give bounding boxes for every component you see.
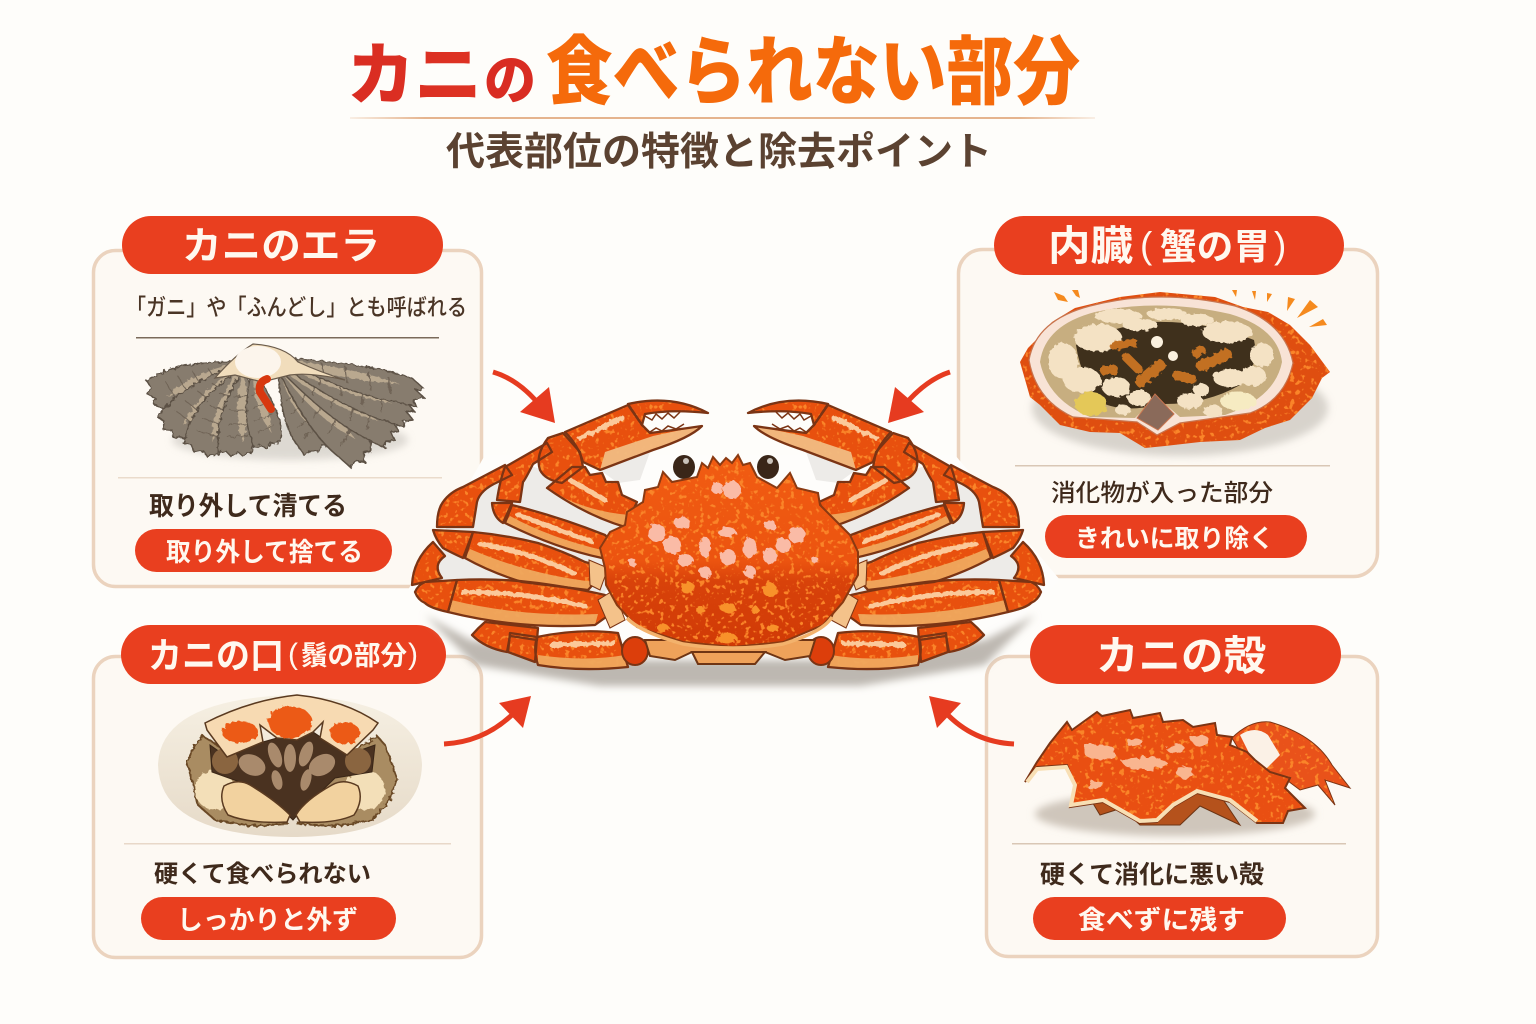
panel: カニのエラ (94, 216, 482, 586)
heading pill: 蟹の胃 (1160, 226, 1270, 267)
icon: gills (142, 344, 428, 473)
action button: 食べずに残す (1078, 905, 1245, 935)
heading pill: 内臓 (1048, 223, 1133, 269)
panel: カニの殻 (986, 625, 1378, 956)
title: カニ (347, 38, 482, 114)
heading pill (994, 216, 1344, 275)
icon: crab shell (1025, 710, 1350, 836)
action button (141, 897, 396, 940)
leg highlights (462, 418, 622, 645)
action button: しっかりと外ず (177, 905, 358, 935)
carapace gold blotches (657, 582, 779, 643)
action button: 取り外して捨てる (166, 537, 363, 567)
heading pill: カニのエラ (182, 226, 380, 268)
action button (135, 529, 392, 572)
action button: きれいに取り除く (1075, 525, 1274, 553)
heading pill: ) (1274, 225, 1286, 266)
icon: open shell with innards (1020, 290, 1330, 456)
icon: crab mouth (158, 695, 422, 837)
heading pill: ( (1140, 225, 1153, 266)
carapace outline (600, 455, 858, 647)
edge spikes (589, 535, 625, 628)
panel: 内臓 (958, 216, 1378, 576)
underside rim (645, 640, 815, 664)
arrow: shell to crab (929, 696, 1014, 744)
title: 食べられない部分 (546, 30, 1080, 114)
heading pill: カニの口 (148, 635, 284, 676)
heading pill: ( (288, 638, 298, 671)
leg tan undersides (448, 426, 702, 669)
carapace rim (627, 617, 832, 648)
arrow: innards to crab (888, 372, 950, 423)
heading pill: 鬚の部分 (301, 641, 407, 671)
feature text: 硬くて消化に悪い殻 (1040, 861, 1264, 889)
feature text: 消化物が入った部分 (1051, 480, 1273, 507)
action button (1045, 515, 1307, 558)
feature text: 取り外して清てる (149, 491, 347, 521)
title underline (350, 117, 1095, 119)
leg outlines (412, 401, 708, 669)
main crab (408, 401, 1060, 686)
crab eyes (673, 455, 779, 479)
heading pill (122, 216, 443, 274)
heading pill (1030, 625, 1341, 684)
arrow: mouth to crab (444, 696, 531, 744)
crab carapace (600, 455, 858, 647)
heading pill: ) (408, 638, 418, 671)
title (347, 30, 1080, 114)
heading pill (121, 625, 446, 684)
heading pill: カニの殻 (1096, 633, 1266, 679)
action button (1033, 897, 1286, 940)
note text: 「ガニ」や「ふんどし」とも呼ばれる (126, 294, 467, 320)
subtitle: 代表部位の特徴と除去ポイント (446, 131, 992, 174)
carapace pale patches (628, 481, 819, 578)
arrow: gills to crab (493, 372, 555, 423)
title: の (484, 51, 536, 111)
panel: カニの口 (94, 625, 482, 958)
feature text: 硬くて食べられない (154, 861, 371, 888)
